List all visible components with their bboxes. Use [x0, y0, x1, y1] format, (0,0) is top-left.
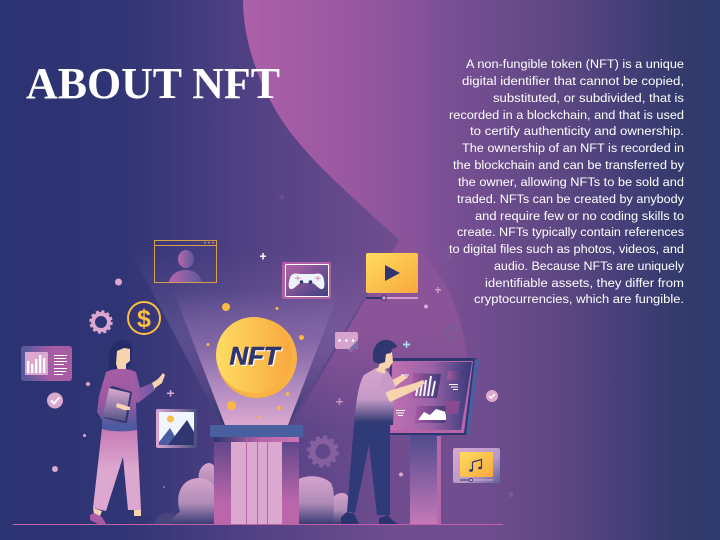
NFT coin [216, 317, 297, 398]
icon: video player [366, 253, 418, 300]
icon: check badge right [486, 390, 498, 402]
description text block: The ownership of an NFT is recorded in [462, 141, 684, 155]
decorative sparkles and small dots [52, 253, 441, 488]
icon: dollar coin: $ [137, 305, 151, 333]
icon: faded gear [308, 437, 338, 466]
icon: chart card [21, 346, 72, 381]
inner light beam [173, 290, 340, 425]
NFT coin: NFT [231, 344, 284, 372]
ground line [13, 524, 503, 525]
description text block: to certify authenticity and ownership. [470, 124, 684, 138]
description text block [449, 57, 685, 306]
outer light beam [125, 233, 403, 425]
description text block: create. NFTs typically contain references [457, 225, 684, 239]
faint background dots and gear [280, 194, 514, 497]
kiosk [390, 358, 479, 524]
NFT coin: NFT [230, 342, 282, 370]
icon: picture frame [156, 409, 197, 448]
icon: chat bubble [335, 332, 358, 352]
icon: gear [90, 312, 112, 332]
description text block: A non-fungible token (NFT) is a unique [466, 57, 684, 71]
description text block: and require few or no coding skills to [475, 209, 684, 223]
description text block: identifiable assets, they differ from [485, 276, 684, 290]
man figure [341, 340, 425, 524]
description text block: the blockchain and can be transferred by [453, 158, 685, 172]
bushes right [297, 476, 352, 524]
bushes left [155, 463, 218, 524]
icon: game controller card [282, 262, 331, 299]
description text block: digital identifier that cannot be copied, [462, 74, 684, 88]
woman figure [90, 340, 165, 524]
description text block: traded. NFTs can be created by anybody [457, 192, 685, 206]
icon: check badge left [47, 392, 63, 408]
icon: dollar coin [128, 302, 160, 334]
description text block: recorded in a blockchain, and that is used [449, 108, 684, 122]
description text block: cryptocurrencies, which are fungible. [474, 292, 684, 306]
icon: profile window [154, 240, 216, 282]
description text block: audio. Because NFTs are uniquely [494, 259, 685, 273]
pedestal [210, 425, 303, 524]
description text block: to digital files such as photos, videos, and [449, 242, 684, 256]
description text block: the owner, allowing NFTs to be sold and [458, 175, 684, 189]
light dome behind the kiosk [290, 233, 467, 430]
gold sparkle dots [206, 303, 304, 419]
icon: music card [453, 448, 500, 483]
title: ABOUT NFT [26, 59, 280, 108]
description text block: substituted, or subdivided, that is [493, 91, 684, 105]
background wave shape [243, 0, 500, 357]
